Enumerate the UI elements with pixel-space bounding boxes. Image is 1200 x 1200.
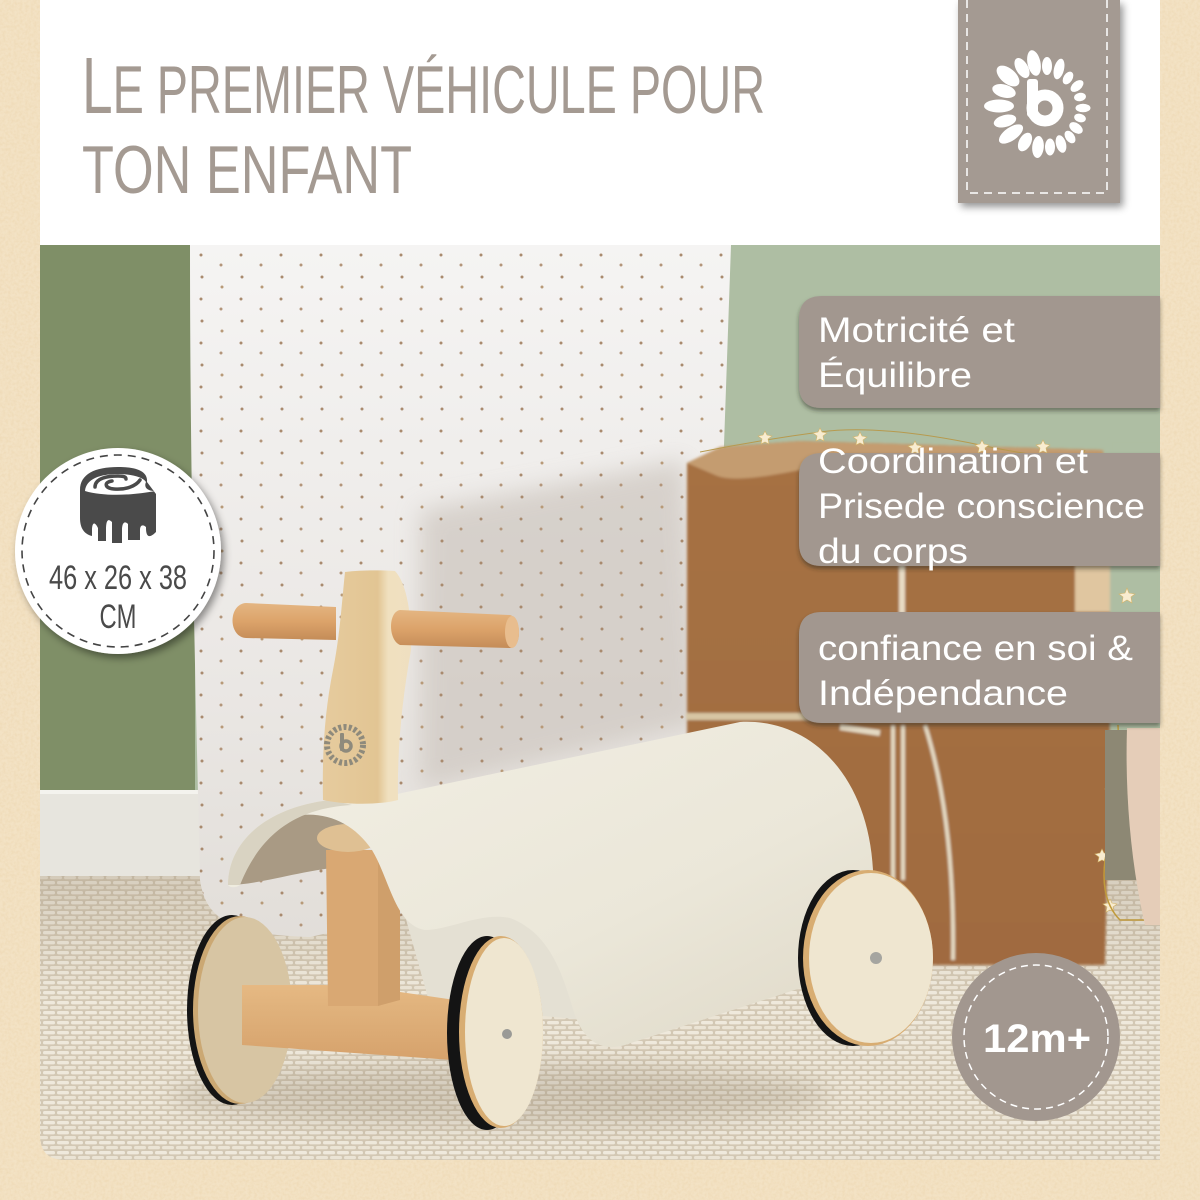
benefit tag: motricité: Motricité et	[818, 311, 1015, 350]
benefit tag: motricité	[799, 296, 1160, 408]
wheel: front right	[447, 936, 543, 1130]
brand label tag	[958, 0, 1120, 203]
crossbar	[242, 985, 455, 1060]
body underside	[395, 880, 585, 1020]
seat lip underside	[228, 805, 352, 885]
age badge: 12m+	[983, 1017, 1091, 1061]
dimensions badge: 46 x 26 x 38	[49, 559, 187, 597]
rug floor	[40, 876, 1160, 1160]
balance bike	[187, 570, 933, 1130]
benefit tag: confiance	[799, 612, 1160, 723]
kraft gift box	[686, 440, 1160, 965]
benefit tag: confiance: Indépendance	[818, 674, 1068, 713]
curved body	[228, 722, 880, 1047]
photo scene	[40, 245, 1160, 1160]
icon: brand sun logo	[984, 49, 1090, 158]
vase and dark corner	[1105, 728, 1160, 925]
title: TON ENFANT	[82, 132, 412, 208]
seat post	[317, 824, 400, 1006]
benefit tag: coordination: Coordination et	[818, 442, 1088, 481]
icon: measuring tape roll	[80, 467, 156, 543]
handlebar	[232, 603, 519, 648]
fairy lights	[700, 428, 1155, 920]
benefit tag: motricité: Équilibre	[818, 356, 972, 395]
wall and skirting	[40, 245, 1160, 885]
dimensions badge	[15, 448, 221, 654]
benefit tag: coordination	[799, 442, 1160, 571]
wheel: rear	[798, 870, 933, 1046]
dotted gift panel	[190, 245, 731, 937]
age badge	[952, 953, 1120, 1121]
icon: small logo on neck	[327, 727, 363, 763]
dimensions badge: CM	[100, 598, 136, 636]
white header band	[40, 0, 1160, 245]
benefit tag: coordination: du corps	[818, 532, 968, 571]
title: LE PREMIER VÉHICULE POUR	[82, 41, 765, 130]
seat lip edge	[228, 800, 352, 885]
neck	[323, 570, 411, 804]
benefit tag: confiance: confiance en soi &	[818, 629, 1133, 668]
benefit tag: coordination: Prisede conscience	[818, 487, 1145, 526]
title	[82, 41, 765, 208]
wheel: back left	[187, 915, 292, 1105]
icon: logo letter b	[1027, 79, 1058, 121]
shadow under bike	[170, 1063, 830, 1127]
